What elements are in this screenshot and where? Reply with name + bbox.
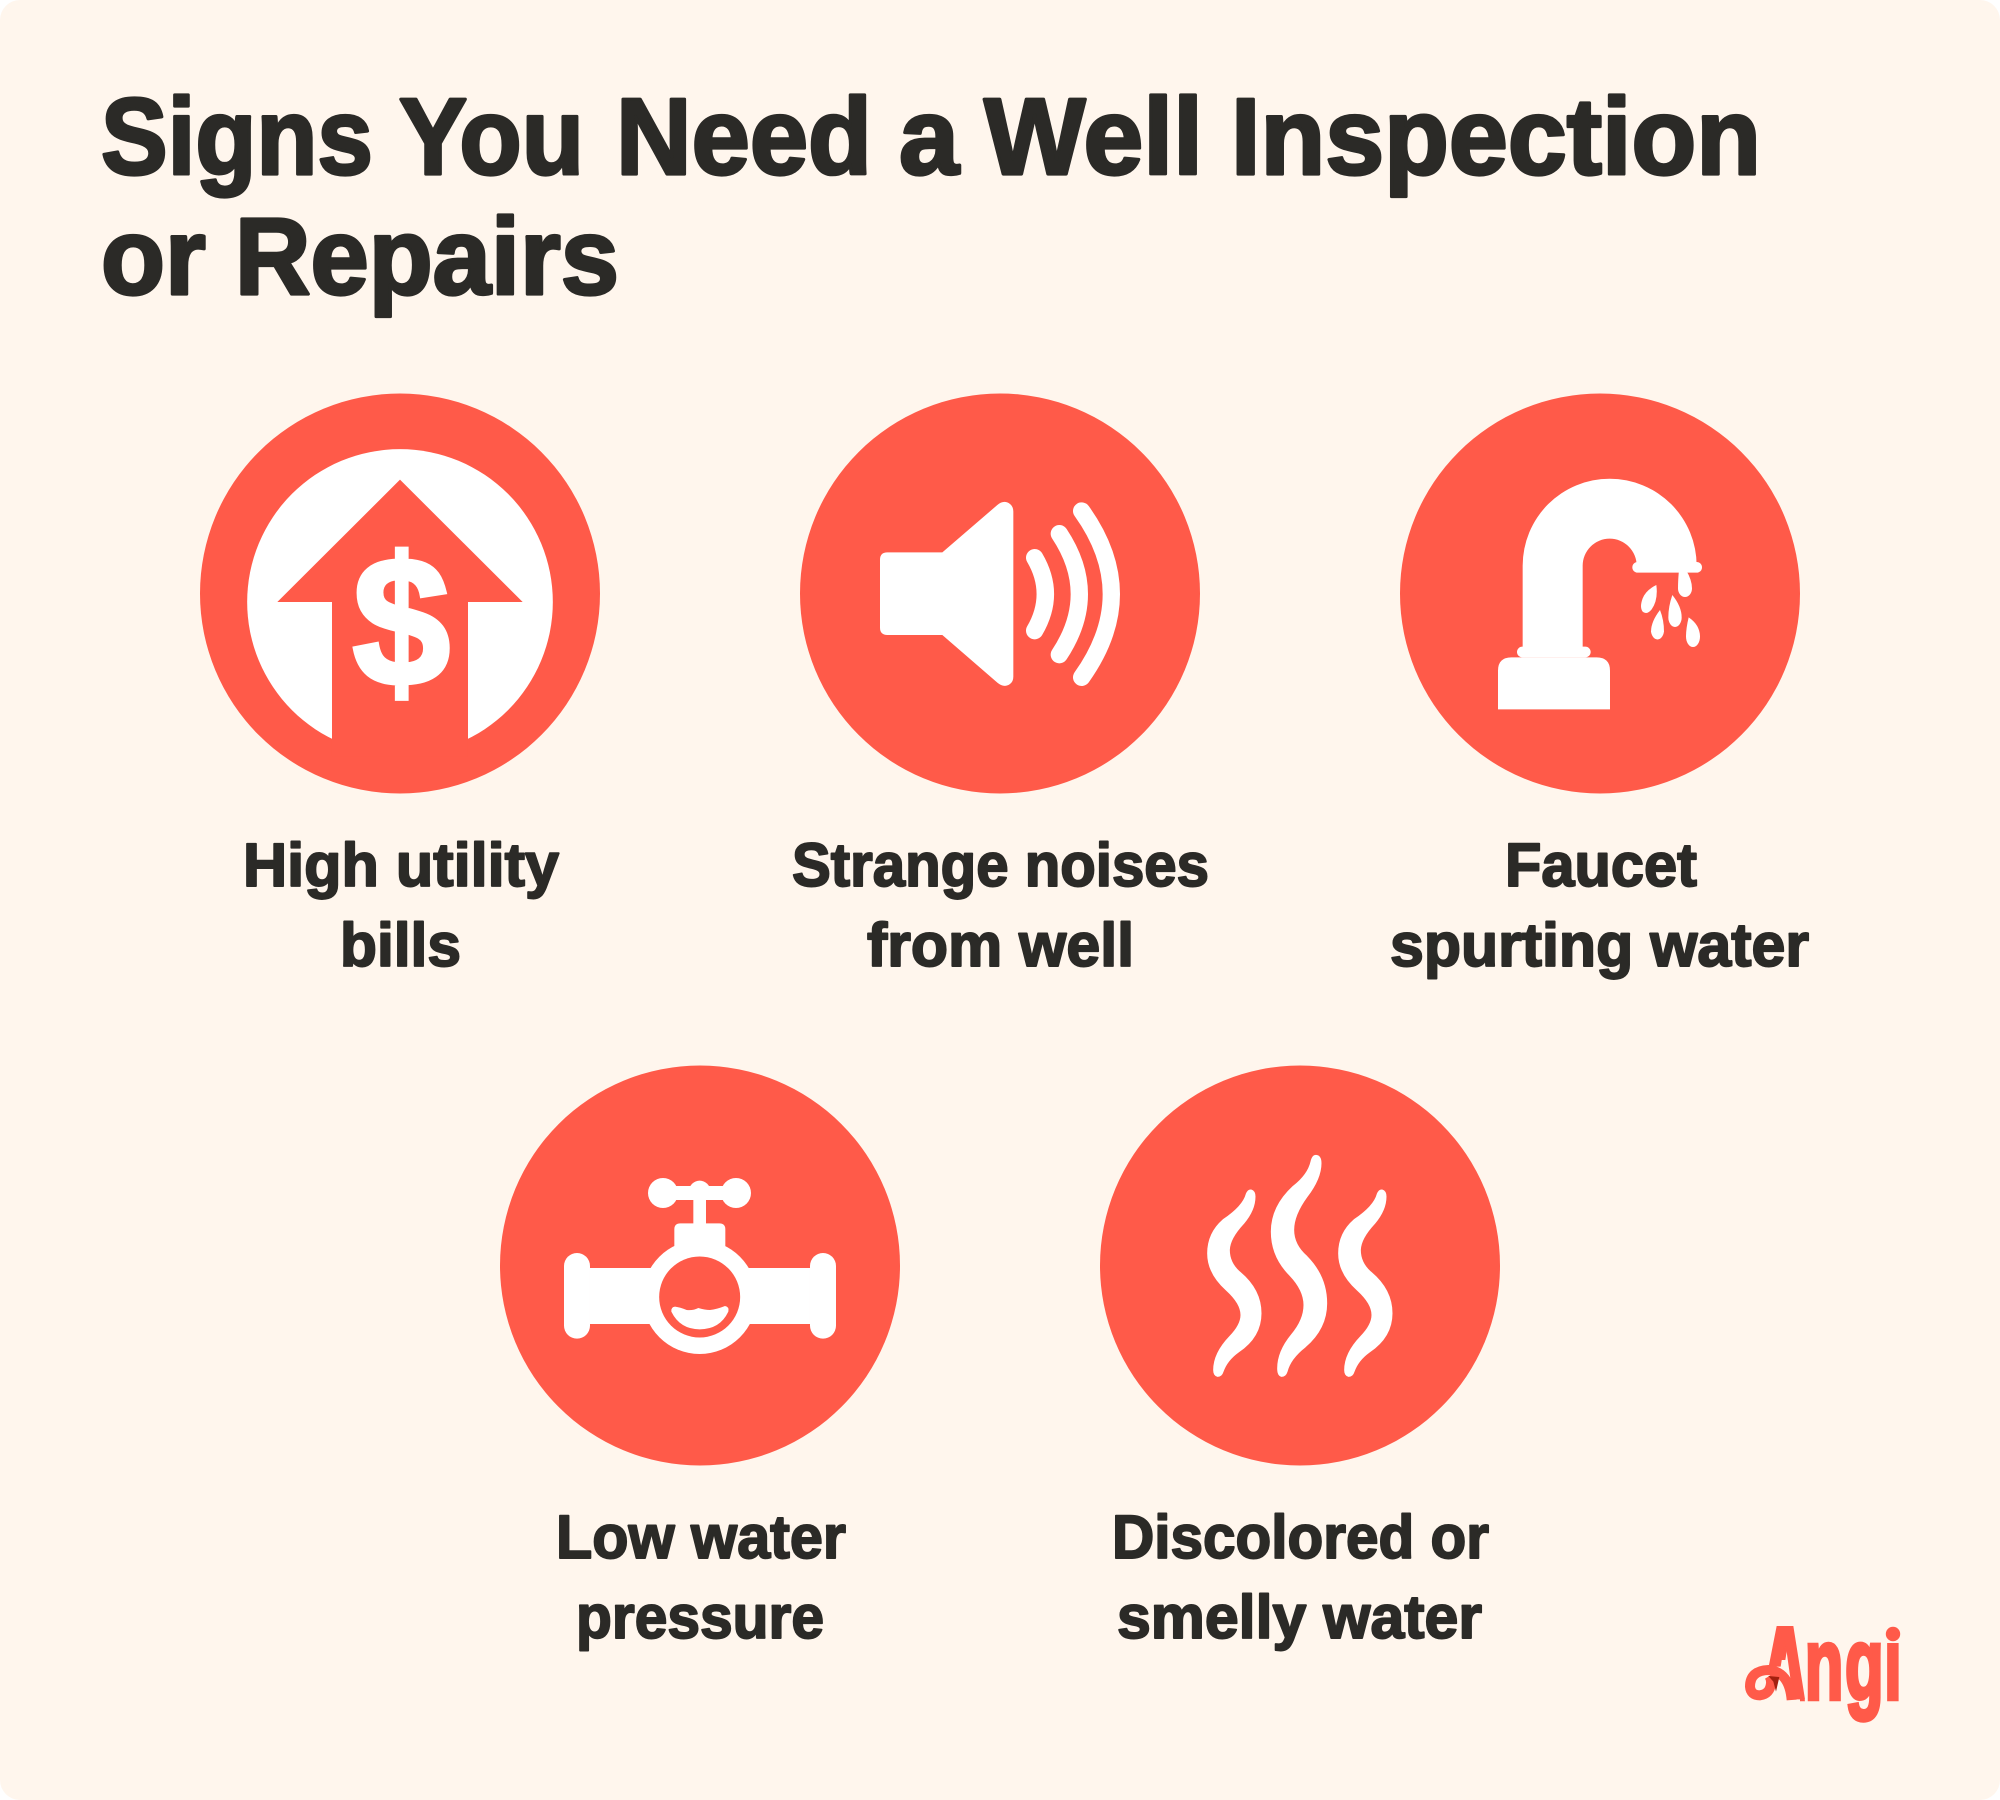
label: strange noises: [792, 831, 1209, 979]
label: discolored or smelly water: smelly water: [1117, 1583, 1482, 1651]
label: low water pressure: pressure: [576, 1583, 824, 1651]
logo: Angi: A: [1770, 1606, 1805, 1721]
logo: Angi: n: [1805, 1606, 1843, 1721]
panel: strange noises: [792, 394, 1209, 979]
logo: Angi: [1750, 1606, 1906, 1721]
logo: Angi: i: [1884, 1606, 1902, 1721]
title: Well: [984, 76, 1203, 198]
title: You: [399, 76, 584, 198]
title: or Repairs: [101, 196, 619, 318]
label: discolored or smelly water: Discolored or: [1112, 1503, 1489, 1571]
icon: odor waves: [1100, 1066, 1500, 1466]
label: faucet spurting water: Faucet: [1505, 831, 1697, 899]
label: high utility bills: bills: [340, 911, 461, 979]
label: discolored or smelly water: [1112, 1503, 1489, 1651]
logo: Angi: g: [1845, 1606, 1884, 1721]
icon: rising cost arrow with dollar sign: $: [353, 519, 450, 724]
label: high utility bills: High utility: [243, 831, 559, 899]
panel: discolored or smelly water: [1100, 1066, 1500, 1651]
icon: dripping faucet: [1400, 394, 1800, 794]
icon: rising cost arrow with dollar sign: [200, 394, 600, 794]
panel: high utility bills: [200, 394, 600, 979]
title: a: [899, 76, 960, 198]
title: Inspection: [1231, 76, 1761, 198]
label: low water pressure: Low water: [556, 1503, 846, 1571]
icon: pipe valve: [500, 1066, 900, 1466]
label: faucet spurting water: spurting water: [1390, 911, 1809, 979]
title: Need: [616, 76, 872, 198]
title: [101, 76, 1761, 318]
label: low water pressure: [556, 1503, 846, 1651]
title: Signs: [101, 76, 373, 198]
icon: speaker: [800, 394, 1200, 794]
label: strange noises: from well: [867, 911, 1134, 979]
label: high utility bills: [243, 831, 559, 979]
panel: low water pressure: [500, 1066, 900, 1651]
label: strange noises: Strange noises: [792, 831, 1209, 899]
label: faucet spurting water: [1390, 831, 1809, 979]
panel: faucet spurting water: [1390, 394, 1809, 979]
